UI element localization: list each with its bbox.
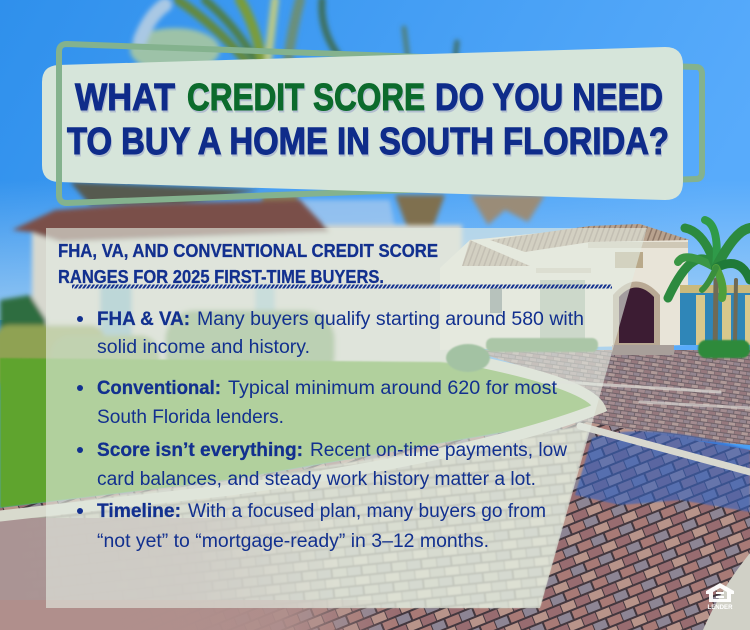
title text: TO BUY A HOME IN SOUTH FLORIDA? [67, 121, 669, 163]
blurred palm tree at top [130, 0, 457, 72]
bullet: Score isn't everything [77, 440, 567, 490]
sky [0, 0, 750, 400]
right windows and columns [680, 285, 750, 345]
foundation shrubs [446, 338, 750, 372]
icon: equal housing lender [706, 583, 734, 611]
title text: WHAT [75, 77, 175, 119]
bullet: FHA and VA: Many buyers qualify starting around 580 with [197, 309, 584, 330]
bullet: FHA and VA [77, 309, 584, 358]
bullet: Conventional: South Florida lenders. [97, 407, 284, 428]
bullet: Score isn't everything: Score isn’t everything: [97, 440, 303, 461]
bullet: Timeline [77, 501, 546, 552]
panel: translucent text panel [46, 228, 647, 608]
bullet: Conventional: Typical minimum around 620 for most [228, 378, 558, 399]
palm trees at right [668, 220, 750, 358]
bullet: Conventional: Conventional: [97, 378, 221, 399]
driveway shadow [575, 431, 750, 512]
title text [67, 77, 669, 163]
panel heading [58, 240, 438, 287]
driveway pavers [0, 350, 750, 630]
panel heading: RANGES FOR 2025 FIRST-TIME BUYERS. [58, 266, 384, 287]
grass lawn [0, 358, 600, 508]
light paver strip bottom right [703, 553, 750, 630]
bullet: FHA and VA: FHA & VA: [97, 309, 190, 330]
heading underline [72, 284, 612, 288]
bullet: FHA and VA: solid income and history. [97, 337, 310, 358]
bullet: Timeline: “not yet” to “mortgage-ready” in 3–12 months. [97, 531, 489, 552]
bullet: Timeline: With a focused plan, many buyers go from [188, 501, 546, 522]
curb strips [0, 362, 750, 516]
title frame [59, 44, 702, 203]
right house [440, 224, 690, 355]
left house wall and foliage, blurred [0, 200, 462, 387]
blurred trunks and fronds below title [70, 182, 545, 245]
bullet: Timeline: Timeline: [97, 501, 181, 522]
title frame front edge [56, 62, 62, 188]
title text: CREDIT SCORE [187, 77, 425, 119]
bullet: Score isn't everything: card balances, and steady work history matter a lot. [97, 469, 536, 490]
panel heading: FHA, VA, AND CONVENTIONAL CREDIT SCORE [58, 240, 438, 261]
title text: DO YOU NEED [435, 77, 663, 119]
bullet: Score isn't everything: Recent on-time payments, low [310, 440, 567, 461]
icon: equal housing lender: LENDER [708, 605, 733, 611]
title card [42, 47, 683, 200]
bullet: Conventional [77, 378, 558, 428]
